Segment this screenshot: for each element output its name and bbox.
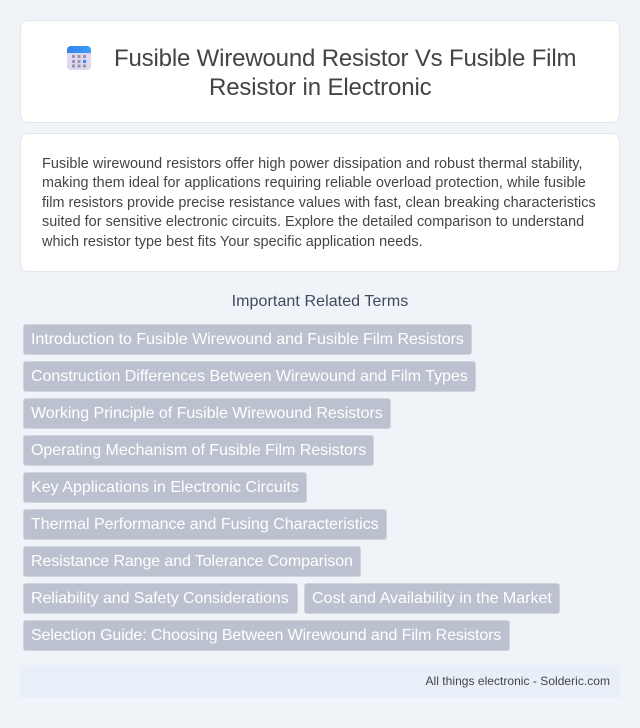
title: [114, 45, 576, 101]
tag: construction: [23, 361, 476, 392]
tag: film mechanism: [23, 435, 374, 466]
tag: film mechanism: Operating Mechanism of Fusible Film Resistors: [31, 442, 366, 459]
panel: description: which resistor type best fits Your specific application needs.: [42, 234, 423, 250]
tag: cost: Cost and Availability in the Market: [312, 590, 552, 607]
tag: introduction: Introduction to Fusible Wirewound and Fusible Film Resistors: [31, 331, 464, 348]
tag: wirewound principle: [23, 398, 391, 429]
panel: description: suited for sensitive electronic circuits. Explore the detailed comparison to understand: [42, 214, 584, 230]
tag: introduction: [23, 324, 472, 355]
panel: description: Fusible wirewound resistors offer high power dissipation and robust thermal stability,: [42, 156, 583, 172]
icon: calendar: [67, 46, 91, 70]
panel: related terms list: [23, 324, 560, 651]
panel: description: making them ideal for applications requiring reliable overload protection, while fusible: [42, 175, 586, 191]
tag: selection guide: [23, 620, 510, 651]
panel: title card: [20, 20, 620, 123]
tag: applications: Key Applications in Electronic Circuits: [31, 479, 299, 496]
tag: applications: [23, 472, 307, 503]
tag: resistance range: Resistance Range and Tolerance Comparison: [31, 553, 353, 570]
heading: important related terms: Important Related Terms: [232, 293, 408, 310]
panel: description: film resistors provide precise resistance values with fast, clean breaking characteristics: [42, 195, 596, 211]
tag: selection guide: Selection Guide: Choosing Between Wirewound and Film Resistors: [31, 627, 501, 644]
tag: reliability: Reliability and Safety Considerations: [31, 590, 289, 607]
tag: cost: [304, 583, 560, 614]
tag: resistance range: [23, 546, 361, 577]
footer text: All things electronic - Solderic.com: [426, 674, 610, 688]
title: Resistor in Electronic: [209, 74, 432, 101]
tag: thermal performance: Thermal Performance and Fusing Characteristics: [31, 516, 379, 533]
title: Fusible Wirewound Resistor Vs Fusible Film: [114, 45, 576, 72]
footer: [20, 665, 620, 698]
panel: description: [20, 133, 620, 272]
tag: reliability: [23, 583, 298, 614]
tag: wirewound principle: Working Principle of Fusible Wirewound Resistors: [31, 405, 383, 422]
tag: construction: Construction Differences Between Wirewound and Film Types: [31, 368, 468, 385]
tag: thermal performance: [23, 509, 387, 540]
